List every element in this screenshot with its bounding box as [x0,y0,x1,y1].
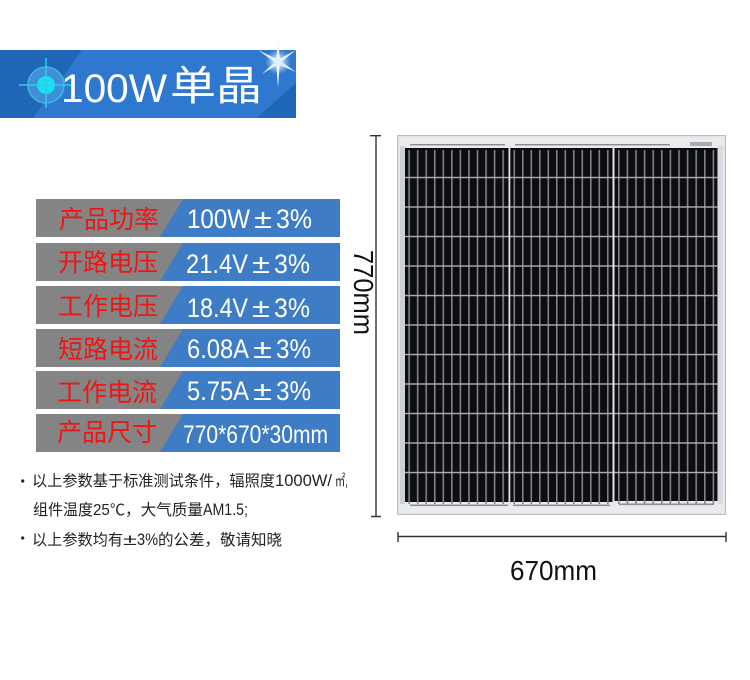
spec row: product power [36,199,340,237]
spec row: working voltage: 18.4V [187,293,248,323]
spec row: open circuit voltage [36,243,340,281]
notes: ㎡, [335,472,348,490]
spec row: open circuit voltage: ± [252,249,270,279]
width dimension [398,532,726,586]
spec row: product size: 770*670*30mm [183,421,328,449]
notes: 的公差，敬请知晓 [158,531,282,549]
notes: AM1.5; [203,500,248,519]
spec row: working current: 工作电流 [57,379,157,407]
height dimension [348,135,381,517]
spec row: open circuit voltage: 21.4V [186,249,248,279]
notes: 以上参数均有 [32,531,123,549]
spec row: working voltage: ± [252,293,270,323]
notes: 25℃ [93,502,125,519]
spec row: product size: 产品尺寸 [57,419,157,447]
solar panel [398,136,726,514]
notes: 3% [137,530,158,549]
spec row: working current: 3% [276,376,311,406]
cells [405,146,718,506]
spec row: working voltage: 工作电压 [58,293,158,321]
notes: 组件温度 [33,501,93,519]
spec row: short circuit current [36,329,340,367]
spec row: short circuit current: ± [253,334,272,364]
spec row: working voltage: 3% [274,293,310,323]
spec row: open circuit voltage: 3% [274,249,310,279]
title banner [0,41,296,118]
spec row: working current: 5.75A [187,376,249,406]
spec row: working current: ± [253,376,272,406]
spec row: short circuit current: 短路电流 [58,336,158,364]
spec row: working current [36,371,340,409]
spec row: product power: 3% [276,204,312,234]
icon: star flare [258,41,296,88]
notes [21,471,348,549]
notes: 以上参数基于标准测试条件，辐照度 [32,472,275,490]
width dimension: 670mm [510,555,597,586]
title text: 单晶 [170,63,262,109]
icon: target crosshair [19,58,75,108]
spec row: product power: 100W [187,204,250,234]
spec row: short circuit current: 3% [276,334,311,364]
spec row: working voltage [36,286,340,324]
title text: 100W [61,67,167,111]
spec row: short circuit current: 6.08A [187,334,249,364]
notes: ± [123,532,138,549]
spec row: open circuit voltage: 开路电压 [58,249,158,277]
spec row: product size [36,414,340,452]
spec row: product power: 产品功率 [59,206,159,234]
height dimension: 770mm [348,250,379,335]
notes: 1000W/ [275,471,332,490]
spec row: product power: ± [254,204,272,234]
notes: ，大气质量 [125,501,203,519]
